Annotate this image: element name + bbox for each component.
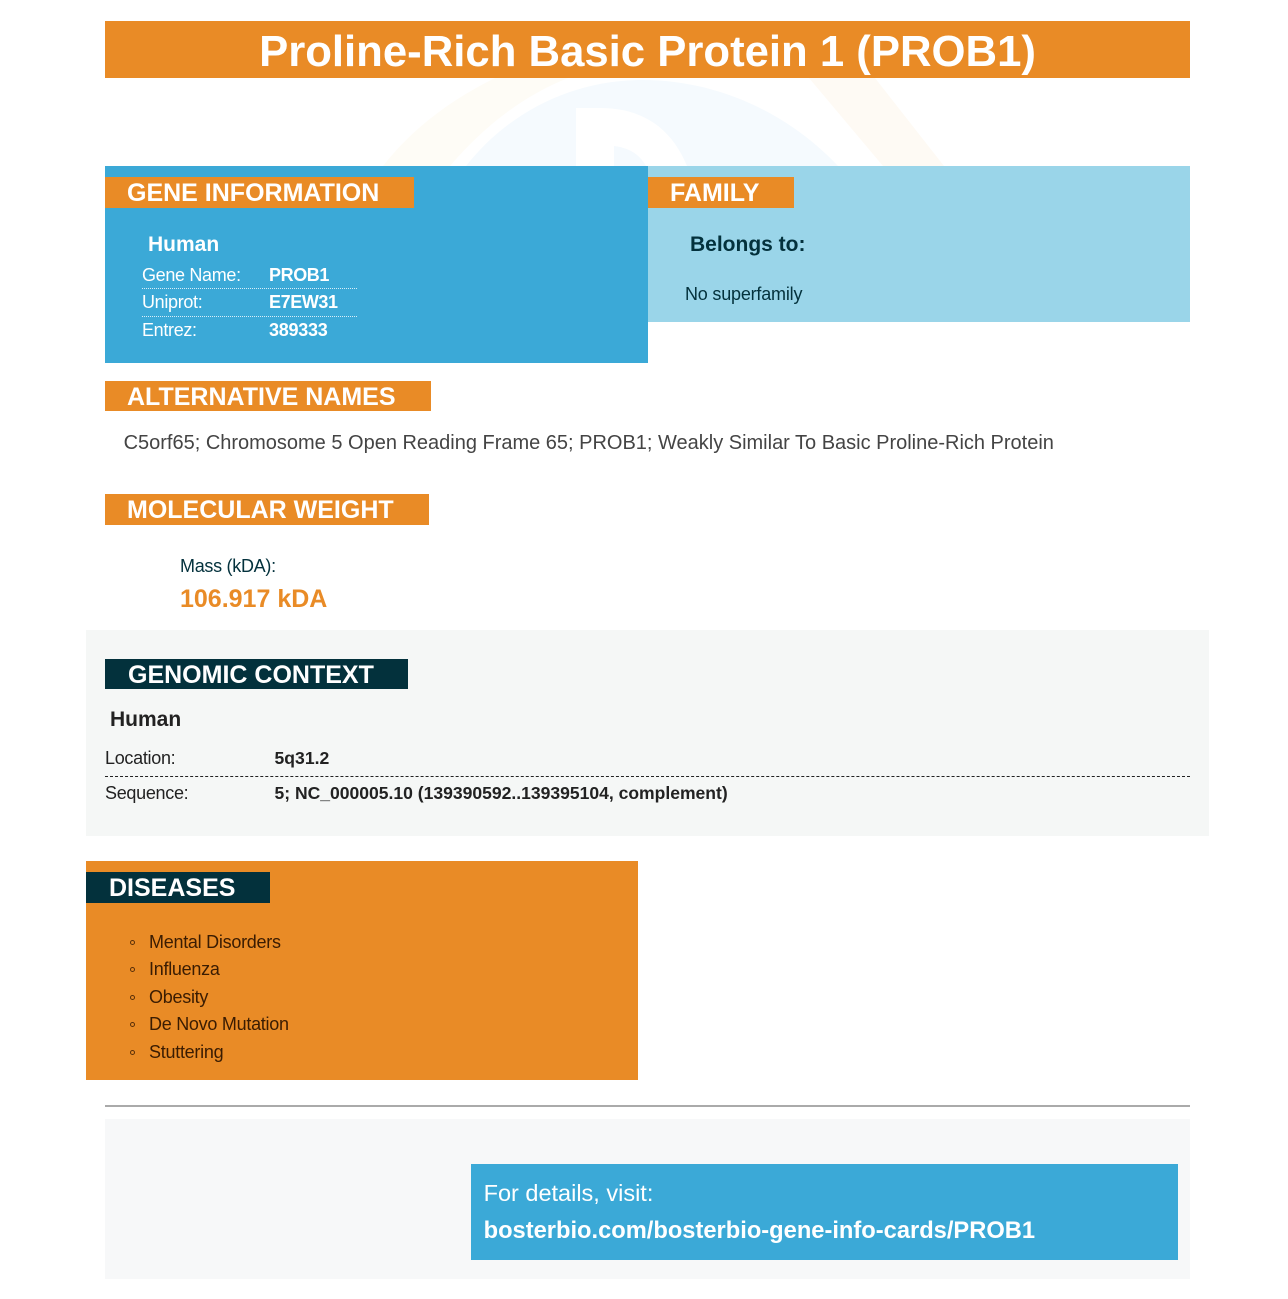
- item: influenza: Influenza: [149, 959, 220, 979]
- item: obesity: Obesity: [149, 987, 208, 1007]
- background watermark logo: [384, 78, 944, 166]
- heading: alternative names: ALTERNATIVE NAMES: [127, 383, 396, 411]
- entrez row: [142, 320, 328, 340]
- panel: diseases: [86, 861, 638, 1080]
- heading: diseases: [86, 872, 270, 903]
- gene name row: Gene Name:: [142, 265, 241, 285]
- item: mental disorders: Mental Disorders: [149, 932, 281, 952]
- entrez row: 389333: [269, 320, 328, 340]
- gene name row: PROB1: [269, 265, 329, 285]
- uniprot row: E7EW31: [269, 292, 338, 312]
- heading: family: [648, 177, 794, 208]
- heading: diseases: DISEASES: [109, 874, 235, 902]
- title banner: [105, 21, 1190, 78]
- alternative names text: C5orf65; Chromosome 5 Open Reading Frame 65; PROB1; Weakly Similar To Basic Proline-Rich Protein: [124, 432, 1054, 454]
- disease list: [130, 932, 289, 1062]
- location row: 5q31.2: [274, 748, 329, 768]
- callout label: For details, visit:: [484, 1180, 653, 1206]
- uniprot row: [142, 290, 357, 317]
- panel: genomic context: [86, 630, 1209, 836]
- item: de novo mutation: De Novo Mutation: [149, 1014, 289, 1034]
- callout url: bosterbio.com/bosterbio-gene-info-cards/PROB1: [484, 1218, 1035, 1244]
- location row: Location:: [105, 748, 175, 768]
- family value: No superfamily: [685, 284, 802, 304]
- heading: gene information: GENE INFORMATION: [127, 179, 379, 207]
- panel: family: [648, 166, 1190, 322]
- panel: gene information: [105, 166, 648, 363]
- heading: molecular weight: MOLECULAR WEIGHT: [127, 496, 394, 524]
- sequence row: 5; NC_000005.10 (139390592..139395104, complement): [274, 783, 728, 803]
- subheading: human: Human: [110, 708, 181, 731]
- heading: family: FAMILY: [670, 179, 759, 207]
- title banner: Proline-Rich Basic Protein 1 (PROB1): [259, 27, 1036, 76]
- mass value: 106.917 kDA: [180, 585, 327, 613]
- heading: genomic context: GENOMIC CONTEXT: [128, 661, 374, 689]
- belongs to label: Belongs to:: [690, 233, 806, 256]
- location row: [105, 746, 1190, 777]
- subheading: human: Human: [148, 233, 219, 256]
- gene name row: [142, 263, 357, 289]
- mass label: Mass (kDA):: [180, 556, 276, 576]
- sequence row: Sequence:: [105, 783, 188, 803]
- callout: details link: [471, 1164, 1178, 1260]
- entrez row: Entrez:: [142, 320, 197, 340]
- panel: footer: [105, 1119, 1190, 1279]
- uniprot row: Uniprot:: [142, 292, 202, 312]
- item: stuttering: Stuttering: [149, 1042, 223, 1062]
